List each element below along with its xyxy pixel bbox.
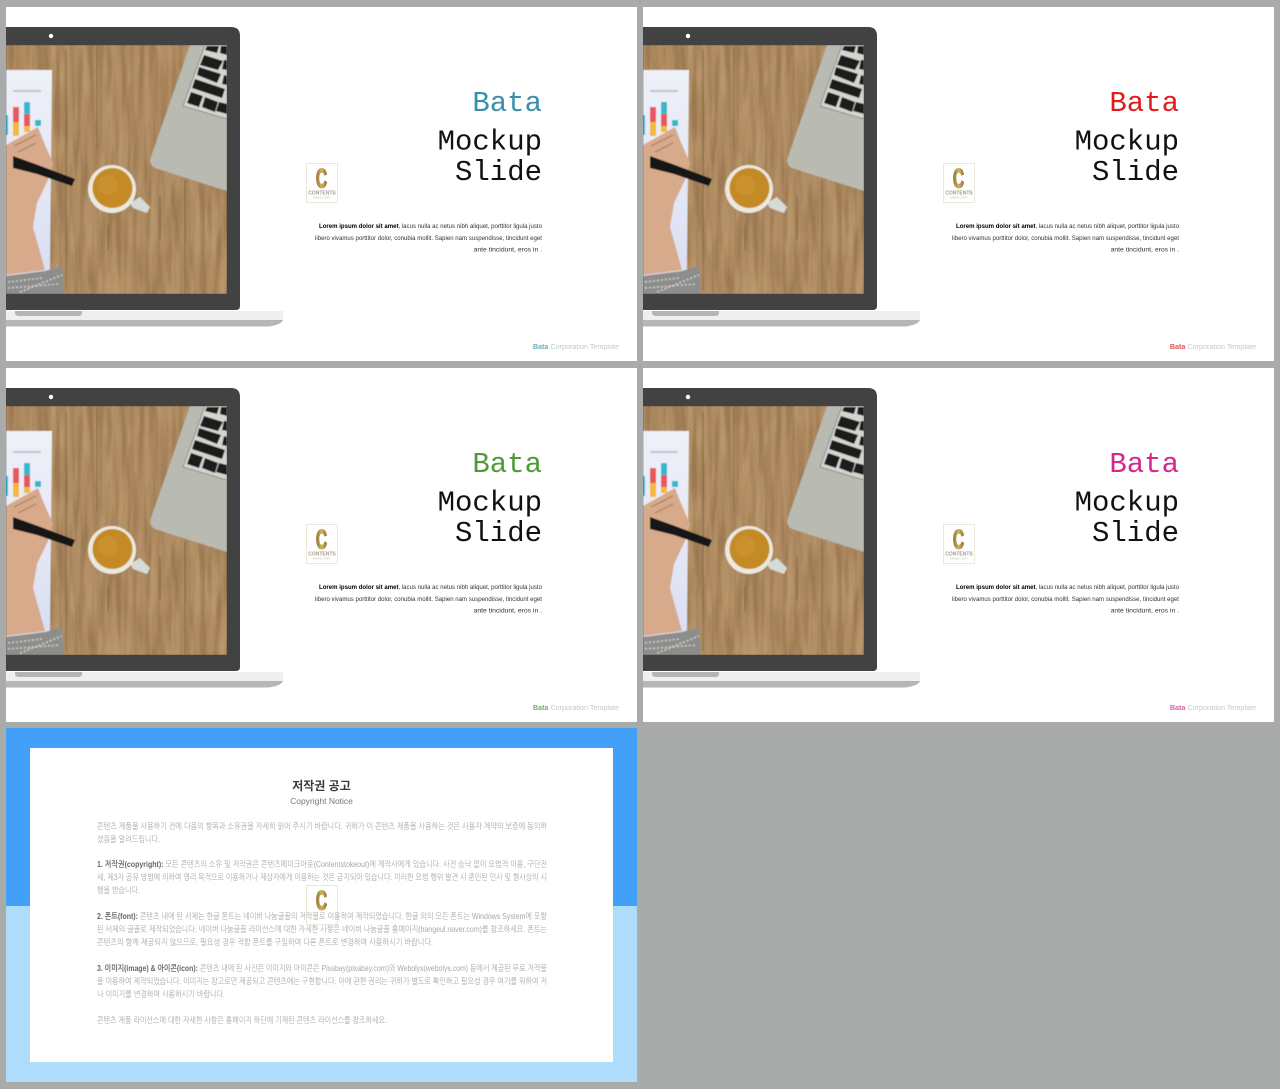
body text: Lorem ipsum dolor sit amet, lacus nulla ac netus nibh aliquet, porttitor ligula justo xyxy=(319,584,542,591)
section 2: font: 된 서체의 글꼴로 제작되었습니다. 네이버 나눔글꼴 라이선스에 대한 자세한 사항은 네이버 나눔글꼴 홈페이지(hangeul.naver.com)를 참조하세요. 폰트는 xyxy=(97,924,547,934)
logo: C xyxy=(316,164,327,194)
closing line: 콘텐츠 제품 라이선스에 대한 자세한 사항은 홈페이지 하단에 기재된 콘텐츠 라이선스를 참조하세요. xyxy=(97,1015,387,1025)
logo xyxy=(944,524,974,564)
heading: Mockup xyxy=(438,126,542,158)
laptop mockup xyxy=(643,388,920,688)
heading: Slide xyxy=(455,517,542,550)
section 1: copyright: 1. 저작권(copyright): 모든 콘텐츠의 소유 및 저작권은 콘텐츠메이크아웃(Contentstokeout)에 제작사에게 있습니다. 사전 승낙 없이 요법적 이용, 구단전 xyxy=(97,859,547,869)
slide 5: copyright notice xyxy=(6,728,637,1082)
body text: Lorem ipsum dolor sit amet, lacus nulla ac netus nibh aliquet, porttitor ligula justo xyxy=(956,584,1179,591)
logo: MAKE COPY xyxy=(950,196,968,200)
section 2: font xyxy=(97,911,547,947)
logo: CONTENTS xyxy=(308,190,336,196)
body text: ante tincidunt, eros in . xyxy=(1111,246,1179,254)
slide 3: green xyxy=(6,368,637,722)
heading: Mockup xyxy=(1075,486,1179,520)
body text: libero vivamus porttitor dolor, conubia mollit. Sapien nam suspendisse, tincidunt eget xyxy=(952,596,1179,603)
section 2: font: 콘텐츠의 함께 제공되지 않으므로, 필요성 경우 적합 폰트를 구입하여 다른 폰트로 변경하여 사용하시기 바랍니다. xyxy=(97,937,433,947)
footer: Bata Corporation Template xyxy=(1170,703,1256,712)
logo: MAKE COPY xyxy=(950,556,968,560)
body text xyxy=(952,584,1179,614)
section 2: font: 2. 폰트(font): 콘텐츠 내에 된 서체는 한글 폰트는 네이버 나눔글꼴의 저작물로 이용하여 제작되었습니다. 한글 외의 모든 폰트는 Windows System에 포함 xyxy=(97,911,547,921)
heading: Bata xyxy=(1109,87,1179,120)
watermark logo: C xyxy=(316,886,327,916)
logo: CONTENTS xyxy=(308,552,336,558)
heading xyxy=(438,87,542,189)
logo: CONTENTS xyxy=(945,552,973,558)
heading: Mockup xyxy=(1075,126,1179,158)
heading xyxy=(1075,448,1179,550)
section 3: image and icon: 나 이미지를 변경하여 사용하시기 바랍니다. xyxy=(97,989,225,999)
logo: C xyxy=(953,524,964,554)
body text: Lorem ipsum dolor sit amet, lacus nulla ac netus nibh aliquet, porttitor ligula justo xyxy=(319,223,542,230)
body text: libero vivamus porttitor dolor, conubia mollit. Sapien nam suspendisse, tincidunt eget xyxy=(315,235,542,242)
logo: MAKE COPY xyxy=(313,196,331,200)
body text xyxy=(315,584,542,614)
heading xyxy=(438,448,542,550)
section 1: copyright xyxy=(97,859,547,895)
logo xyxy=(306,524,338,564)
section 3: image and icon xyxy=(97,963,547,999)
body text: Lorem ipsum dolor sit amet, lacus nulla ac netus nibh aliquet, porttitor ligula justo xyxy=(956,223,1179,230)
section 1: copyright: 행을 받습니다. xyxy=(97,885,140,895)
footer: Bata Corporation Template xyxy=(1170,342,1256,351)
heading: Slide xyxy=(1092,517,1179,550)
logo: C xyxy=(316,524,327,554)
heading: Slide xyxy=(1092,156,1179,189)
heading: Bata xyxy=(472,448,542,481)
intro paragraph xyxy=(97,821,547,844)
section 3: image and icon: 을 이용하여 제작되었습니다. 이미지는 참고로만 제공되고 콘텐츠에는 구현합니다. 이에 관한 권리는 귀하가 별도로 확인하고 필요성 경우 여기를 위하여 저 xyxy=(97,976,547,986)
footer: Bata Corporation Template xyxy=(533,703,619,712)
body text: libero vivamus porttitor dolor, conubia mollit. Sapien nam suspendisse, tincidunt eget xyxy=(952,235,1179,242)
logo: CONTENTS xyxy=(945,190,973,196)
logo xyxy=(944,164,974,202)
slide 1: teal xyxy=(6,7,637,361)
notice title: 저작권 공고 xyxy=(292,778,351,793)
body text: ante tincidunt, eros in . xyxy=(1111,608,1179,614)
notice panel xyxy=(30,748,613,1062)
laptop mockup xyxy=(643,27,920,326)
watermark logo xyxy=(306,886,338,924)
intro paragraph: 셨음을 알려드립니다. xyxy=(97,834,160,844)
section 1: copyright: 세, 제3자 공유 방법에 의하여 영리 목적으로 이용하거나 제삼자에게 이용하는 것은 금지되어 있습니다. 이러한 요법 행위 발견 시 준민된 민사 및 형사상의 시 xyxy=(97,872,547,882)
heading: Bata xyxy=(1109,448,1179,481)
body text: ante tincidunt, eros in . xyxy=(474,608,542,614)
notice subtitle: Copyright Notice xyxy=(290,796,353,806)
heading: Slide xyxy=(455,156,542,189)
slide 4: pink xyxy=(643,368,1274,722)
section 3: image and icon: 3. 이미지(image) & 아이콘(icon): 콘텐츠 내에 된 사진은 이미지와 아이콘은 Pixabay(pixabay.com)와 Webolys(webolys.com) 등에서 제공된 무료 저작물 xyxy=(97,963,547,973)
logo: MAKE COPY xyxy=(313,556,331,560)
slide 2: red xyxy=(643,7,1274,361)
body text xyxy=(952,223,1179,254)
heading: Mockup xyxy=(438,486,542,520)
body text xyxy=(315,223,542,254)
body text: ante tincidunt, eros in . xyxy=(474,246,542,254)
laptop mockup xyxy=(6,388,283,688)
body text: libero vivamus porttitor dolor, conubia mollit. Sapien nam suspendisse, tincidunt eget xyxy=(315,596,542,603)
heading xyxy=(1075,87,1179,189)
heading: Bata xyxy=(472,87,542,120)
laptop mockup xyxy=(6,27,283,326)
logo xyxy=(306,164,338,202)
logo: C xyxy=(953,164,964,194)
footer: Bata Corporation Template xyxy=(533,342,619,351)
intro paragraph: 콘텐츠 제품을 사용하기 전에 다음의 항목과 소유권을 자세히 읽어 주시기 바랍니다. 귀하가 이 콘텐츠 제품을 사용하는 것은 사용자 계약의 보증에 동의하 xyxy=(97,821,547,831)
